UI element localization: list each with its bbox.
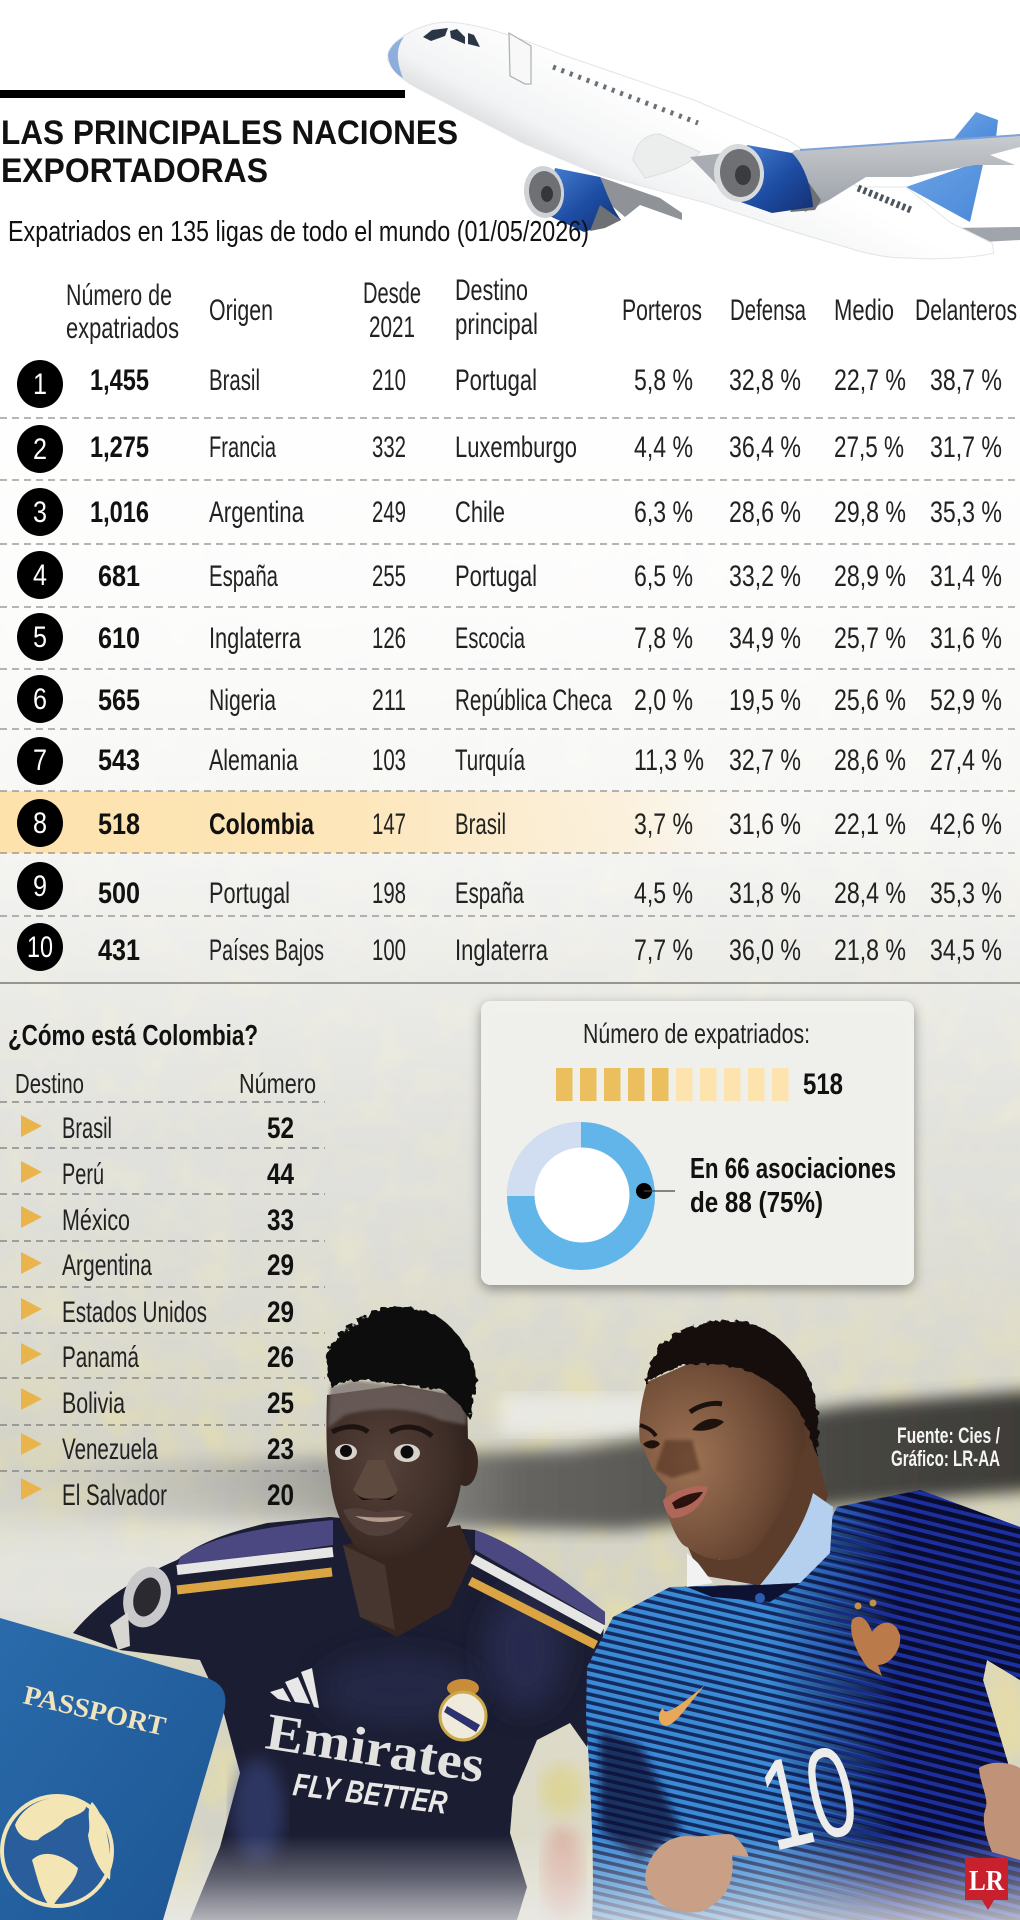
row 10: 10 <box>27 931 53 964</box>
heading: Colombia: ¿Cómo está Colombia? <box>8 1020 258 1052</box>
row 3: 28,6 % <box>729 496 801 529</box>
row 2: 36,4 % <box>729 431 801 464</box>
donut chart 75% <box>507 1122 675 1270</box>
LR logo <box>965 1858 1008 1910</box>
row 3: 249 <box>372 496 406 529</box>
neck <box>687 1440 828 1585</box>
row 7: 28,6 % <box>834 744 906 777</box>
list rows: Argentina <box>62 1249 152 1282</box>
row 1: 32,8 % <box>729 364 801 397</box>
passport <box>0 1618 225 1920</box>
face <box>326 1385 468 1557</box>
panel: expatriates card <box>481 1001 914 1285</box>
table header: expatriados <box>66 312 179 345</box>
row 7: Turquía <box>455 744 525 777</box>
neck <box>343 1525 473 1637</box>
table header: 2021 <box>369 311 415 344</box>
row 2 <box>17 425 1002 473</box>
row 2: 2 <box>33 433 47 466</box>
row 6: 211 <box>372 684 406 717</box>
rear stabilizer <box>951 227 1020 243</box>
row 4: 33,2 % <box>729 560 801 593</box>
collar <box>687 1493 833 1603</box>
list rows: México <box>62 1204 130 1237</box>
title: LAS PRINCIPALES NACIONES <box>1 114 458 152</box>
highlight band: Colombia <box>0 791 1020 853</box>
row 10: 431 <box>98 934 140 967</box>
row 9: 500 <box>98 877 140 910</box>
subtitle: Expatriados en 135 ligas de todo el mundo (01/05/2026) <box>8 216 589 248</box>
jersey <box>73 1517 605 1920</box>
cockpit windows <box>423 28 480 47</box>
row 10 <box>17 923 1002 971</box>
player: France jersey <box>586 1321 1020 1920</box>
row 9: 198 <box>372 877 406 910</box>
row 4: Portugal <box>455 560 537 593</box>
row 7: 103 <box>372 744 406 777</box>
table header: Porteros <box>622 294 702 327</box>
row 4: 255 <box>372 560 406 593</box>
list rows: 33 <box>267 1204 294 1237</box>
list header: Destino <box>15 1068 84 1099</box>
row 8: Colombia <box>17 799 1002 847</box>
brows and eyes <box>640 1403 724 1448</box>
table header: Medio <box>834 294 894 327</box>
engine right <box>711 142 821 213</box>
list rows: Venezuela <box>62 1433 158 1466</box>
row 1 <box>17 360 1002 408</box>
title rule <box>0 90 405 98</box>
airplane <box>388 22 1020 259</box>
adidas logo <box>270 1668 319 1708</box>
hair <box>645 1321 819 1456</box>
engine left <box>521 164 621 232</box>
fuselage <box>388 22 994 259</box>
row 4 <box>17 551 1002 599</box>
row 4: 28,9 % <box>834 560 906 593</box>
shirt number: 10 <box>748 1718 870 1878</box>
shoulder bands <box>177 1520 333 1568</box>
row 6 <box>17 675 1002 723</box>
table header: Destino <box>455 274 528 307</box>
nose <box>353 1460 398 1500</box>
swoosh <box>659 1685 705 1726</box>
row 9: España <box>455 877 524 910</box>
tail fin <box>906 112 998 222</box>
row 1: Brasil <box>209 364 260 397</box>
row 6: República Checa <box>455 684 612 717</box>
wing <box>775 135 1020 212</box>
row 10: 7,7 % <box>634 934 693 967</box>
list header <box>15 1068 316 1099</box>
row 8: Colombia: Brasil <box>455 808 506 841</box>
row 6: 25,6 % <box>834 684 906 717</box>
title: EXPORTADORAS <box>1 152 268 190</box>
source credit <box>891 1423 1000 1471</box>
list rows: 29 <box>267 1296 294 1329</box>
mouth <box>343 1508 413 1536</box>
champions league patch <box>110 1560 178 1650</box>
list rows: El Salvador <box>62 1479 167 1512</box>
row 5: 34,9 % <box>729 622 801 655</box>
row 6: 19,5 % <box>729 684 801 717</box>
background: blurred stadium <box>0 739 1020 1920</box>
list rows: 29 <box>267 1249 294 1282</box>
row 2: Francia <box>209 431 276 464</box>
row 6: 6 <box>33 683 47 716</box>
table header: Desde <box>363 277 421 310</box>
LR logo: LR <box>969 1866 1005 1897</box>
row 4: España <box>209 560 278 593</box>
hands <box>645 1763 1020 1912</box>
list rows: 20 <box>267 1479 294 1512</box>
table header: principal <box>455 308 538 341</box>
ranking table <box>17 360 1002 971</box>
left pylon and flaps <box>600 177 682 220</box>
donut callout: de 88 (75%) <box>690 1187 823 1219</box>
row 10: 36,0 % <box>729 934 801 967</box>
row 6: 2,0 % <box>634 684 693 717</box>
donut callout: En 66 asociaciones <box>690 1153 896 1185</box>
card label: Número de expatriados: <box>583 1018 810 1049</box>
rooster crest <box>851 1600 900 1676</box>
row 8: Colombia: 3,7 % <box>634 808 693 841</box>
row 7: 32,7 % <box>729 744 801 777</box>
row 9: Portugal <box>209 877 290 910</box>
bar scale: 518 <box>803 1068 843 1101</box>
globe <box>2 1796 112 1908</box>
ear <box>778 1404 816 1460</box>
row 5: Inglaterra <box>209 622 301 655</box>
list rows: Brasil <box>62 1112 112 1145</box>
row 5: 610 <box>98 622 140 655</box>
row 3: 29,8 % <box>834 496 906 529</box>
row 3: 3 <box>33 496 47 529</box>
list rows: 44 <box>267 1158 294 1191</box>
row 5: 5 <box>33 621 47 654</box>
list header: Número <box>239 1068 316 1099</box>
row 8: Colombia: 8 <box>33 807 47 840</box>
bottom fade <box>0 1835 1020 1920</box>
row 8: Colombia: 518 <box>98 808 140 841</box>
row 9: 31,8 % <box>729 877 801 910</box>
row 10: Inglaterra <box>455 934 548 967</box>
row 7: 11,3 % <box>634 744 704 777</box>
row 1: 5,8 % <box>634 364 693 397</box>
list rows: 26 <box>267 1341 294 1374</box>
row 4: 681 <box>98 560 140 593</box>
row 1: 22,7 % <box>834 364 906 397</box>
list rows: 52 <box>267 1112 294 1145</box>
row 9 <box>17 862 1002 910</box>
row 8: Colombia: 147 <box>372 808 406 841</box>
title <box>1 114 458 190</box>
face <box>639 1360 805 1560</box>
table header: Número de <box>66 279 172 312</box>
row 9: 28,4 % <box>834 877 906 910</box>
ear <box>452 1438 478 1486</box>
row 2: 27,5 % <box>834 431 904 464</box>
nose shadow <box>655 1440 700 1478</box>
list rows: Panamá <box>62 1341 139 1374</box>
real madrid crest <box>440 1679 486 1740</box>
jersey fold shadow <box>600 1730 682 1860</box>
wing fairing <box>633 134 700 178</box>
row 10: 21,8 % <box>834 934 906 967</box>
hair <box>325 1307 477 1420</box>
list rows: 25 <box>267 1387 294 1420</box>
table header <box>66 274 1017 345</box>
row 5: Escocia <box>455 622 525 655</box>
jersey tonal patches <box>232 1590 565 1862</box>
row 4: 6,5 % <box>634 560 693 593</box>
row 2: 332 <box>372 431 406 464</box>
jersey <box>586 1490 1020 1920</box>
row 5: 126 <box>372 622 406 655</box>
nose tint <box>388 37 404 78</box>
row 7: 543 <box>98 744 140 777</box>
row 10: Países Bajos <box>209 934 324 967</box>
row 9: 4,5 % <box>634 877 693 910</box>
row 10: 100 <box>372 934 406 967</box>
row 8: Colombia: 31,6 % <box>729 808 801 841</box>
inner wing <box>690 153 725 190</box>
list: destinations of Colombian players <box>0 1068 325 1512</box>
row 5 <box>17 613 1002 661</box>
row 2: 4,4 % <box>634 431 693 464</box>
mouth <box>663 1486 708 1518</box>
row 9: 9 <box>33 870 47 903</box>
donut callout <box>690 1153 896 1219</box>
row 4: 4 <box>33 559 47 592</box>
row 6: 565 <box>98 684 140 717</box>
row 6: Nigeria <box>209 684 276 717</box>
row 3 <box>17 488 1002 536</box>
row 1: 1,455 <box>90 364 149 397</box>
row 2: Luxemburgo <box>455 431 577 464</box>
row 8: Colombia: Colombia <box>209 808 314 841</box>
door <box>509 33 531 84</box>
cabin windows <box>553 67 911 210</box>
list rows <box>62 1112 294 1512</box>
row 1: Portugal <box>455 364 537 397</box>
row 1: 210 <box>372 364 406 397</box>
sponsor: Emirates <box>262 1704 488 1794</box>
dark jersey side <box>776 1490 1020 1920</box>
table header: Origen <box>209 294 273 327</box>
row 3: Argentina <box>209 496 304 529</box>
row 7: 7 <box>33 744 47 777</box>
jersey stripes <box>177 1552 603 1645</box>
list rows: Perú <box>62 1158 104 1191</box>
row 3: Chile <box>455 496 505 529</box>
passport label: PASSPORT <box>21 1680 169 1741</box>
row 3: 1,016 <box>90 496 149 529</box>
row 7 <box>17 737 1002 785</box>
row 5: 25,7 % <box>834 622 906 655</box>
row 7: Alemania <box>209 744 298 777</box>
bar scale <box>556 1068 843 1101</box>
row 2: 1,275 <box>90 431 149 464</box>
shaved forehead <box>328 1380 467 1428</box>
sponsor line 2: FLY BETTER <box>291 1766 449 1821</box>
list rows: Estados Unidos <box>62 1296 207 1329</box>
player: Real Madrid jersey <box>73 1307 605 1920</box>
row 1: 1 <box>33 368 47 401</box>
eyes and brows <box>332 1427 432 1462</box>
row 8: Colombia: 22,1 % <box>834 808 906 841</box>
row 5: 7,8 % <box>634 622 693 655</box>
table header: Defensa <box>730 294 806 327</box>
list rows: 23 <box>267 1433 294 1466</box>
list rows: Bolivia <box>62 1387 125 1420</box>
row 3: 6,3 % <box>634 496 693 529</box>
